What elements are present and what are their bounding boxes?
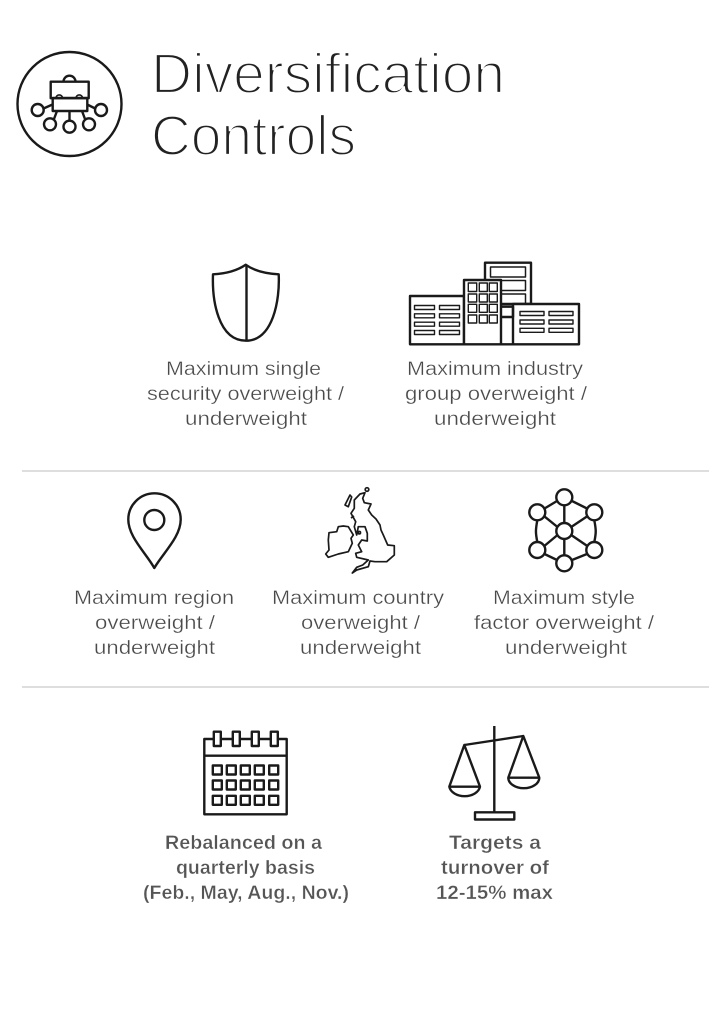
label: region: underweight — [94, 637, 216, 659]
label: rebalancing: (Feb., May, Aug., Nov.) — [143, 882, 349, 904]
title — [151, 42, 505, 168]
label: rebalancing: Rebalanced on a — [165, 832, 322, 854]
label: turnover: 12-15% max — [436, 882, 553, 904]
title: Diversification — [151, 42, 505, 106]
label: turnover: Targets a — [449, 832, 541, 854]
label: region: Maximum region — [74, 587, 234, 609]
label: country — [272, 587, 444, 659]
icon: calendar — [204, 732, 287, 814]
label: style factor: factor overweight / — [474, 612, 655, 634]
label: country: underweight — [300, 637, 422, 659]
label: style factor — [474, 587, 655, 659]
icon: balance scales — [449, 726, 539, 820]
icon: shield — [213, 265, 279, 341]
label: single security: Maximum single — [166, 358, 321, 380]
label: single security — [147, 358, 345, 430]
label: region: overweight / — [95, 612, 216, 634]
icon: portfolio briefcase network in circle — [18, 52, 122, 156]
icon: map of UK and Ireland — [326, 488, 394, 573]
label: country: overweight / — [301, 612, 421, 634]
label: single security: underweight — [185, 408, 308, 430]
icon: style factor network — [529, 489, 602, 571]
label: rebalancing: quarterly basis — [176, 857, 315, 879]
label: turnover — [436, 832, 553, 904]
icon: map pin — [128, 493, 181, 568]
title: Controls — [151, 104, 356, 168]
label: region — [74, 587, 234, 659]
label: industry group: Maximum industry — [407, 358, 583, 380]
icon: office buildings — [410, 263, 579, 344]
label: industry group — [405, 358, 588, 430]
label: industry group: underweight — [434, 408, 557, 430]
label: turnover: turnover of — [441, 857, 550, 879]
label: single security: security overweight / — [147, 383, 345, 405]
label: country: Maximum country — [272, 587, 444, 609]
label: style factor: Maximum style — [493, 587, 635, 609]
label: style factor: underweight — [505, 637, 628, 659]
label: rebalancing — [143, 832, 349, 904]
label: industry group: group overweight / — [405, 383, 588, 405]
